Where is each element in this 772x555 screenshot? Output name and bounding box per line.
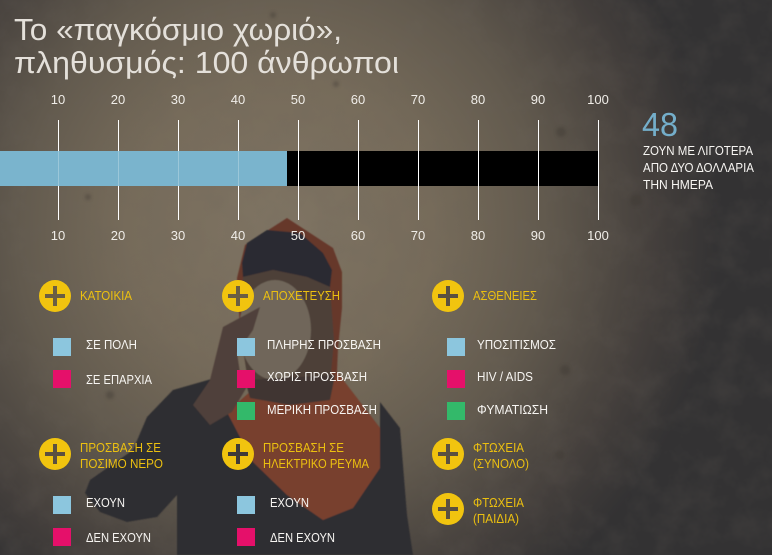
hand and forearm — [193, 307, 260, 425]
panel: housing — [39, 280, 153, 388]
bottom axis labels: 90 — [531, 228, 545, 243]
bar: 48 — [0, 151, 287, 186]
panel: poverty children — [432, 493, 525, 526]
panel: sanitation — [222, 280, 381, 420]
legend: partial access — [237, 402, 377, 420]
legend: HIV: HIV / AIDS — [477, 370, 533, 384]
heading — [473, 441, 529, 471]
body: dark jacket — [85, 378, 413, 555]
bottom axis labels: 100 — [587, 228, 609, 243]
legend: partial access: ΜΕΡΙΚΗ ΠΡΟΣΒΑΣΗ — [267, 403, 377, 417]
icon: plus — [432, 280, 464, 312]
bottom axis labels: 10 — [51, 228, 65, 243]
icon: plus — [222, 280, 254, 312]
callout: 48: ΑΠΟ ΔΥΟ ΔΟΛΛΑΡΙΑ — [643, 161, 755, 175]
icon: plus — [222, 438, 254, 470]
bottom axis labels: 40 — [231, 228, 245, 243]
bottom axis labels: 30 — [171, 228, 185, 243]
top axis labels: 40 — [231, 92, 245, 107]
title: πληθυσμός: 100 άνθρωποι — [14, 45, 399, 80]
legend: city: ΣΕ ΠΟΛΗ — [86, 338, 137, 352]
heading: ΦΤΩΧΕΙΑ — [473, 496, 525, 510]
top axis labels — [51, 92, 609, 107]
legend: have: ΕΧΟΥΝ — [86, 496, 125, 510]
heading: ΠΡΟΣΒΑΣΗ ΣΕ — [80, 441, 161, 455]
callout: 48: ΖΟΥΝ ΜΕ ΛΙΓΟΤΕΡΑ — [643, 144, 754, 158]
legend: province: ΣΕ ΕΠΑΡΧΙΑ — [86, 373, 153, 387]
bottom axis labels: 80 — [471, 228, 485, 243]
heading — [80, 441, 163, 471]
icon: plus — [432, 438, 464, 470]
callout: 48: ΤΗΝ ΗΜΕΡΑ — [643, 178, 714, 192]
hood — [227, 218, 380, 520]
bottom axis labels — [51, 228, 609, 243]
callout: 48: 48 — [642, 106, 678, 143]
legend: full access: ΠΛΗΡΗΣ ΠΡΟΣΒΑΣΗ — [267, 338, 381, 352]
legend: malnutrition: ΥΠΟΣΙΤΙΣΜΟΣ — [477, 338, 556, 352]
top axis labels: 20 — [111, 92, 125, 107]
bottom axis labels: 20 — [111, 228, 125, 243]
legend: do not have — [237, 528, 335, 546]
cap — [242, 230, 332, 287]
legend: no access — [237, 370, 367, 388]
panel: electricity — [222, 438, 370, 546]
heading — [473, 496, 525, 526]
bar: remaining 52 — [287, 151, 598, 186]
top axis labels: 10 — [51, 92, 65, 107]
bottom axis labels: 60 — [351, 228, 365, 243]
heading: ΚΑΤΟΙΚΙΑ — [80, 289, 133, 303]
top axis labels: 100 — [587, 92, 609, 107]
chin and neck shadow — [245, 375, 335, 405]
heading: ΠΡΟΣΒΑΣΗ ΣΕ — [263, 441, 344, 455]
panel: poverty overall — [432, 438, 529, 471]
top axis labels: 90 — [531, 92, 545, 107]
gridlines — [58, 120, 598, 220]
callout: 48 — [642, 106, 755, 192]
heading: ΑΣΘΕΝΕΙΕΣ — [473, 289, 537, 303]
bottom axis labels: 50 — [291, 228, 305, 243]
panel: drinking water — [39, 438, 163, 546]
scarf: lower brighter part — [227, 372, 380, 520]
bottle — [239, 280, 311, 380]
icon: plus — [39, 438, 71, 470]
legend: do not have: ΔΕΝ ΕΧΟΥΝ — [86, 531, 151, 545]
heading: (ΠΑΙΔΙΑ) — [473, 512, 519, 526]
top axis labels: 30 — [171, 92, 185, 107]
title — [14, 12, 399, 80]
legend: have: ΕΧΟΥΝ — [270, 496, 309, 510]
heading: ΦΤΩΧΕΙΑ — [473, 441, 525, 455]
heading: ΑΠΟΧΕΤΕΥΣΗ — [263, 289, 340, 303]
bottom axis labels: 70 — [411, 228, 425, 243]
top axis labels: 50 — [291, 92, 305, 107]
icon: plus — [432, 493, 464, 525]
legend: have — [237, 496, 309, 514]
heading: ΠΟΣΙΜΟ ΝΕΡΟ — [80, 457, 163, 471]
legend: tuberculosis: ΦΥΜΑΤΙΩΣΗ — [477, 403, 548, 417]
legend: no access: ΧΩΡΙΣ ΠΡΟΣΒΑΣΗ — [267, 370, 367, 384]
heading — [263, 441, 370, 471]
face — [240, 270, 334, 398]
legend: full access — [237, 338, 381, 356]
panel: diseases — [432, 280, 556, 420]
heading: ΗΛΕΚΤΡΙΚΟ ΡΕΥΜΑ — [263, 457, 370, 471]
top axis labels: 60 — [351, 92, 365, 107]
icon: plus — [39, 280, 71, 312]
top axis labels: 70 — [411, 92, 425, 107]
photo: person drinking from a bottle — [85, 218, 413, 555]
legend: do not have: ΔΕΝ ΕΧΟΥΝ — [270, 531, 335, 545]
title: Το «παγκόσμιο χωριό», — [14, 12, 342, 47]
heading: (ΣΥΝΟΛΟ) — [473, 457, 529, 471]
top axis labels: 80 — [471, 92, 485, 107]
bar chart: 48 of 100 people — [0, 92, 609, 243]
